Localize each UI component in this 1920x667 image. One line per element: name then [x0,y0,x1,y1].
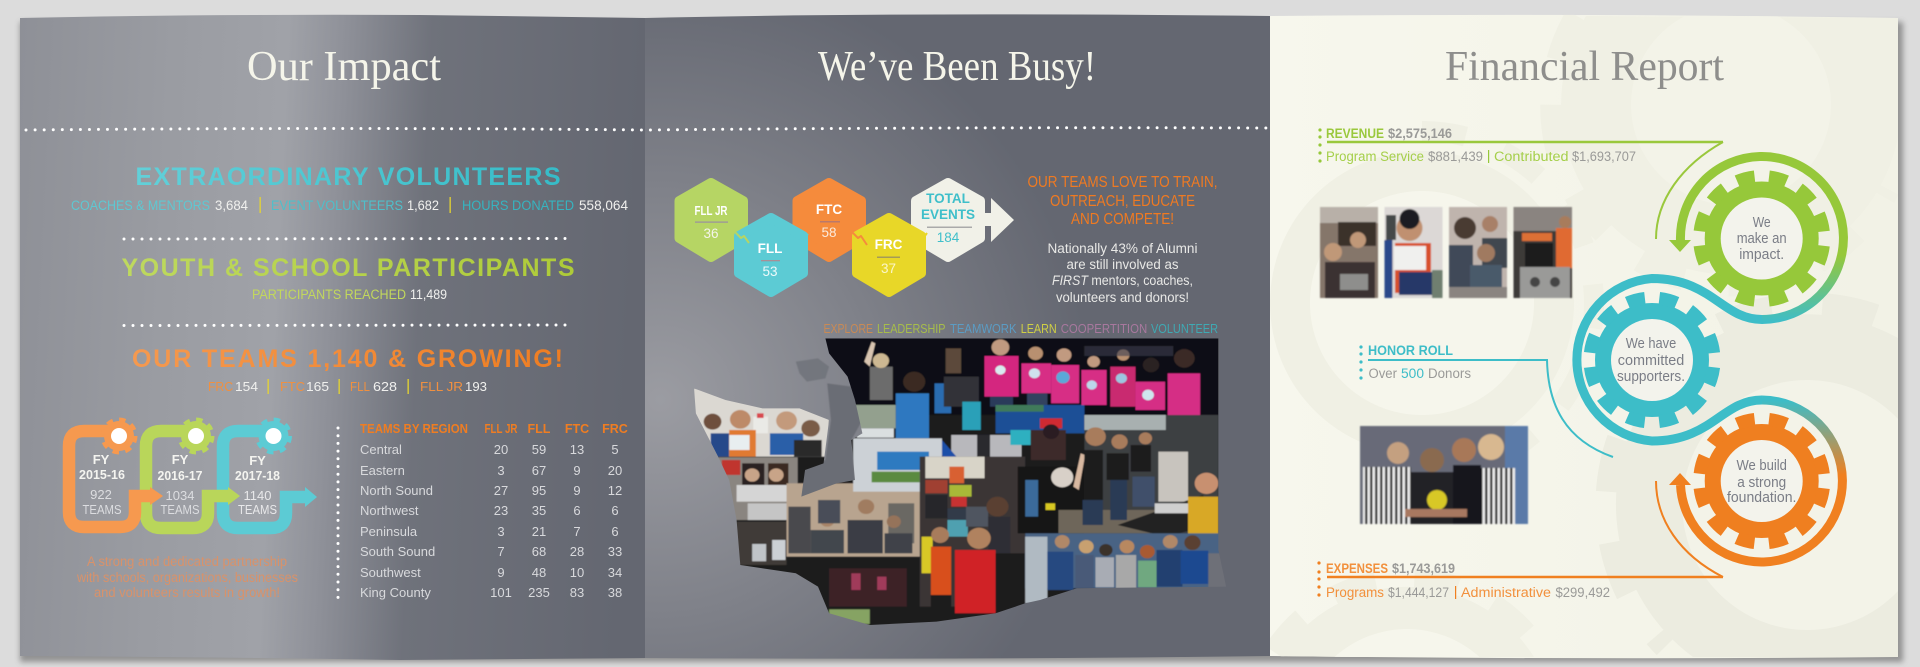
team counts: 628 [373,379,397,394]
table: teams by region: 3 [497,524,505,539]
expenses block: $299,492 [1556,585,1610,600]
text: alumni statistic: Nationally 43% of Alumni [1048,241,1198,256]
table: teams by region: 9 [573,483,581,498]
honor roll block: Over [1368,366,1397,381]
hexagon: FLL: 53 [762,264,778,279]
hexagon: FLL [739,218,803,292]
table header: FLL JR [484,422,518,436]
FY labels [79,452,280,517]
gear watermark: bottom right [1596,329,1746,656]
revenue block: REVENUE [1326,126,1384,141]
table: teams by region: 83 [570,585,584,600]
panel: our impact [20,15,645,660]
text: partnership caption [76,554,298,600]
FY labels: FY [172,452,189,467]
collage centre: robotics teams [787,483,922,557]
team counts: 193 [465,379,487,394]
FY labels: 1034 [166,488,194,503]
collage bottom right: group of volunteers [1025,533,1227,588]
table header: TEAMS BY REGION [360,422,468,436]
table header [360,422,628,436]
chart: yearly team growth arrows [69,420,317,528]
text: values row: TEAMWORK [950,322,1017,336]
team counts: 154 [235,379,258,394]
expenses block: $1,444,127 [1388,585,1449,600]
honor roll block [1359,343,1613,457]
heading: our teams love to train [1028,174,1218,228]
volunteer stats: 1,682 [407,198,439,213]
text: partnership caption: and volunteers results in growth! [94,585,280,600]
text: partnership caption: A strong and dedicated partnership [87,554,287,569]
volunteer stats [71,197,628,213]
team counts: FLL [350,379,370,394]
table: teams by region: 6 [573,503,581,518]
table: teams by region: 7 [497,544,505,559]
dotted divider across panels [26,128,1266,326]
hexagon: FTC [798,183,861,257]
diagram: connected gear flow [1577,157,1843,562]
hexagon: FRC: FRC [875,237,903,252]
FY labels: FY [93,452,110,467]
table area [996,405,1084,433]
heading: our teams love to train: OUR TEAMS LOVE TO TRAIN, [1028,174,1218,191]
team counts: 165 [306,379,329,394]
table: teams by region: Northwest [360,503,419,518]
table: teams by region: 20 [494,442,508,457]
text: values row [824,322,1218,336]
title: financial report: Financial Report [1445,44,1724,90]
team counts [208,379,487,394]
hexagon: FRC: 37 [881,261,896,276]
arrowhead: orange [1669,473,1691,485]
hexagon: FLL JR: 36 [703,226,719,241]
text: alumni statistic: FIRST mentors, coaches, [1052,273,1193,288]
gear: we build a strong foundation: foundation. [1727,490,1796,506]
FY labels: FY [249,453,266,468]
collage top: teams in pink and blue [984,356,1019,397]
FY labels: 2017-18 [235,468,280,483]
table: teams by region: 7 [573,524,581,539]
ribbon: orange segment [1680,400,1842,562]
table header: FRC [602,422,628,436]
honor roll block: HONOR ROLL [1368,343,1453,358]
collage right: students and robot [1018,467,1084,533]
team counts: FLL JR [420,379,463,394]
gear: we have committed supporters: supporters. [1617,369,1685,385]
arrowhead: green [1669,240,1691,252]
gear: we make an impact: We [1753,215,1771,231]
table: teams by region: 27 [494,483,508,498]
hexagon: FLL JR [680,183,743,257]
text: alumni statistic: volunteers and donors! [1056,290,1189,305]
arrow: FY 2015-16 [69,420,163,527]
table: teams by region: North Sound [360,483,433,498]
gear: we have committed supporters [1583,291,1721,429]
volunteer stats: EVENT VOLUNTEERS [271,198,403,213]
table: teams by region: 34 [608,565,622,580]
table: teams by region: 35 [532,503,546,518]
table: teams by region: Central [360,442,402,457]
table: teams by region: 95 [532,483,546,498]
text: alumni statistic: are still involved as [1066,257,1179,272]
hexagon: FLL JR: FLL JR [694,203,728,218]
team counts: FRC [208,379,233,394]
revenue block: $1,693,707 [1572,149,1636,164]
table: teams by region: 21 [532,524,546,539]
revenue block: $2,575,146 [1388,126,1452,141]
expenses block: Programs [1326,585,1384,600]
heading: our teams love to train: AND COMPETE! [1071,211,1174,228]
referee [870,367,893,400]
text: partnership caption: with schools, organizations, businesses [76,570,298,585]
table: teams by region: King County [360,585,431,600]
gear: we build a strong foundation: a strong [1737,475,1786,491]
hexagon: FTC: FTC [816,202,842,217]
volunteer stats: 3,684 [215,198,248,213]
puzzle notches [735,231,927,245]
ribbon: teal segment [1577,278,1762,441]
gear watermark: top right [1552,16,1898,285]
revenue block: Contributed [1494,149,1568,164]
table header: FTC [565,422,589,436]
table: teams by region: Southwest [360,565,421,580]
table: teams by region: 10 [570,565,584,580]
honor roll block: 500 [1401,366,1424,381]
table: teams by region: 235 [528,585,550,600]
title: we've been busy: We’ve Been Busy! [818,44,1096,90]
honor roll block: Donors [1428,366,1471,381]
table: teams by region: 12 [608,483,622,498]
hexagon: total events with arrow: TOTAL [926,191,970,206]
table: teams by region [360,422,628,600]
puget sound and islands [796,358,862,507]
table: teams by region: 3 [497,463,505,478]
blue teams [896,393,929,438]
table: teams by region: 28 [570,544,584,559]
expenses block: Administrative [1461,585,1551,600]
expenses block: EXPENSES [1326,561,1388,576]
table: teams by region: Eastern [360,463,405,478]
hexagon: total events with arrow [916,183,1014,257]
FY labels: 1140 [244,488,271,503]
text: values row: COOPERTITION [1061,322,1147,336]
panel: financial report [1270,15,1898,658]
table: teams by region: 9 [573,463,581,478]
photo: volunteers group [1360,426,1528,524]
gear: we build a strong foundation: We build [1736,458,1787,474]
gear watermark: middle left [1270,167,1358,440]
hexagon: FRC [857,218,921,292]
table: teams by region: 38 [608,585,622,600]
FY labels: TEAMS [82,502,122,517]
expenses block: $1,743,619 [1392,561,1455,576]
table: teams by region: Peninsula [360,524,418,539]
chart: event hexagons [680,183,1014,292]
background gears [1270,167,1746,657]
volunteer stats: HOURS DONATED [462,198,574,213]
text: values row: EXPLORE [824,322,873,336]
participants stat: PARTICIPANTS REACHED [252,287,406,302]
ribbon: green segment [1680,157,1843,320]
table header: FLL [528,422,551,436]
gear: we have committed supporters: committed [1618,353,1684,369]
table: teams by region: 6 [611,503,619,518]
table: teams by region: 6 [611,524,619,539]
table: teams by region: 68 [532,544,546,559]
gear: we build a strong foundation [1693,412,1831,550]
gear: we make an impact: impact. [1739,247,1784,263]
hexagon: FLL: FLL [758,241,782,256]
revenue block: Program Service [1326,149,1424,164]
arrow: FY 2017-18 [223,420,317,528]
hexagon: total events with arrow: 184 [937,230,960,245]
table: teams by region: 33 [608,544,622,559]
heading: our teams love to train: OUTREACH, EDUCATE [1050,193,1195,210]
hexagon: FTC: 58 [821,225,837,240]
volunteer stats: COACHES & MENTORS [71,198,210,213]
revenue block [1318,126,1723,239]
FY labels: TEAMS [238,502,277,517]
gear: we make an impact: make an [1737,231,1787,247]
collage left: young students [692,388,829,457]
revenue block: $881,439 [1428,149,1483,164]
photo collage: Washington state map [685,333,1232,630]
FY labels: 2016-17 [158,468,202,483]
photos: four student photos [1320,207,1572,298]
volunteer stats: 558,064 [579,198,628,213]
title: our impact: Our Impact [247,44,441,90]
FY labels: 922 [90,487,112,502]
arrow: FY 2016-17 [146,420,240,528]
panel: we've been busy [645,14,1270,659]
FY labels: 2015-16 [79,467,125,482]
table: teams by region: 9 [497,565,505,580]
table: teams by region: 13 [570,442,584,457]
table: teams by region: South Sound [360,544,435,559]
expenses block [1317,481,1723,600]
table: teams by region: 23 [494,503,508,518]
table: teams by region: 20 [608,463,622,478]
gear: we make an impact [1693,170,1831,307]
gear watermark: bottom left [1270,579,1414,657]
heading: youth and school participants: YOUTH & SCHOOL PARTICIPANTS [122,254,574,282]
FY labels: TEAMS [160,502,200,517]
text: alumni statistic [1048,241,1198,305]
gear: we have committed supporters: We have [1626,336,1676,352]
heading: extraordinary volunteers: EXTRAORDINARY VOLUNTEERS [136,163,560,191]
participants stat: 11,489 [410,287,447,302]
collage centre: t-shirt wall and kids [920,457,1025,607]
text: values row: LEADERSHIP [877,322,946,336]
table: teams by region: 101 [490,585,512,600]
team counts: FTC [280,379,305,394]
heading: our teams: OUR TEAMS 1,140 & GROWING! [132,345,563,373]
hexagon: total events with arrow: EVENTS [921,207,975,222]
text: values row: VOLUNTEER [1151,322,1218,336]
table: teams by region: 59 [532,442,546,457]
table: teams by region: 5 [611,442,619,457]
table: teams by region: 67 [532,463,546,478]
table: teams by region: 48 [532,565,546,580]
text: values row: LEARN [1021,322,1057,336]
